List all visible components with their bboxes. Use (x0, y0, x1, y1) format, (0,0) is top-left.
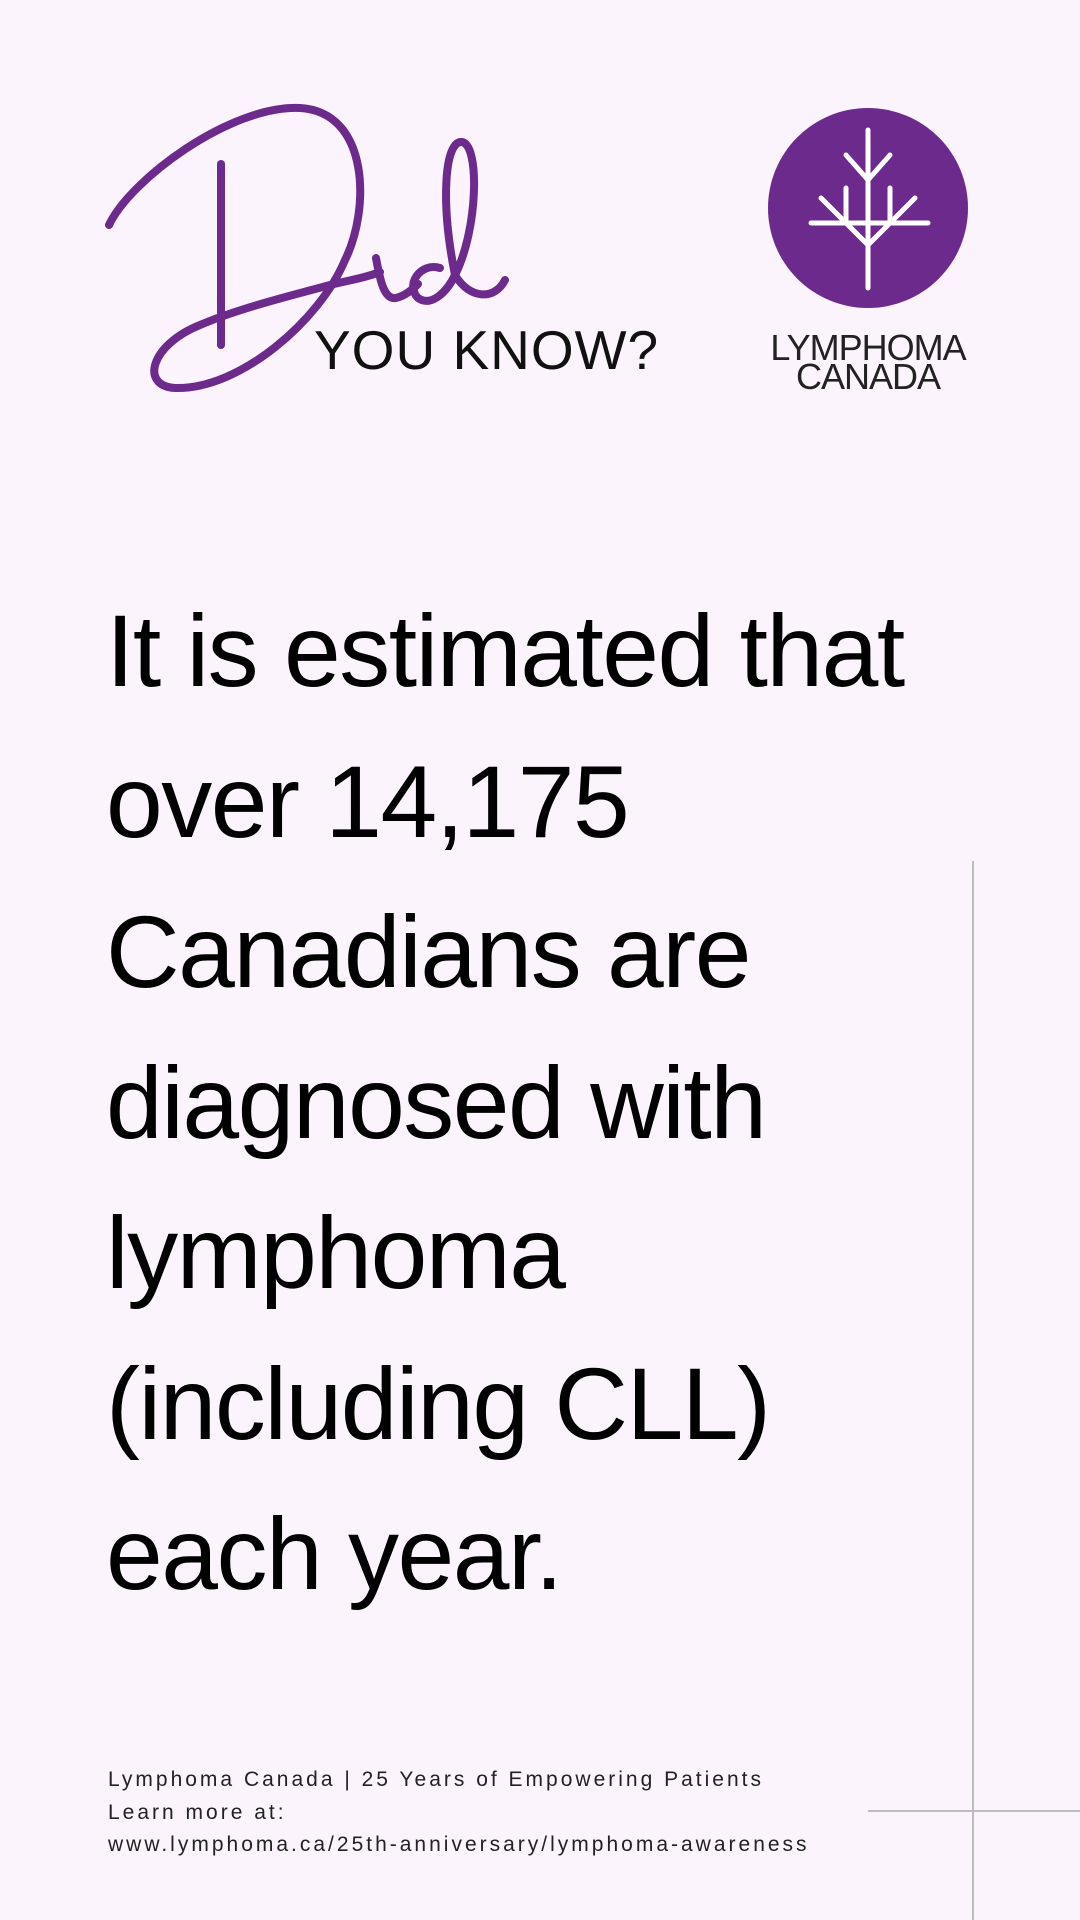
main statement text: Canadians are (106, 895, 750, 1009)
main statement text (106, 594, 904, 1611)
logo text: CANADA (796, 356, 940, 397)
icon: tree in purple circle (768, 108, 968, 308)
main statement text: lymphoma (106, 1196, 565, 1310)
main statement text: over 14,175 (106, 744, 628, 858)
main statement text: (including CLL) (106, 1346, 770, 1460)
logo text (770, 327, 966, 397)
heading: YOU KNOW?: YOU KNOW? (314, 319, 659, 381)
footer text: Learn more at: (108, 1800, 287, 1824)
main statement text: each year. (106, 1497, 562, 1611)
footer text (108, 1768, 810, 1856)
script heading: Did (105, 104, 509, 392)
logo text: LYMPHOMA (770, 327, 966, 368)
footer text: Lymphoma Canada | 25 Years of Empowering Patients (108, 1768, 764, 1791)
footer text: www.lymphoma.ca/25th-anniversary/lymphoma-awareness (108, 1833, 810, 1856)
logo: Lymphoma Canada (768, 108, 968, 397)
main statement text: diagnosed with (106, 1046, 765, 1160)
main statement text: It is estimated that (106, 594, 904, 708)
